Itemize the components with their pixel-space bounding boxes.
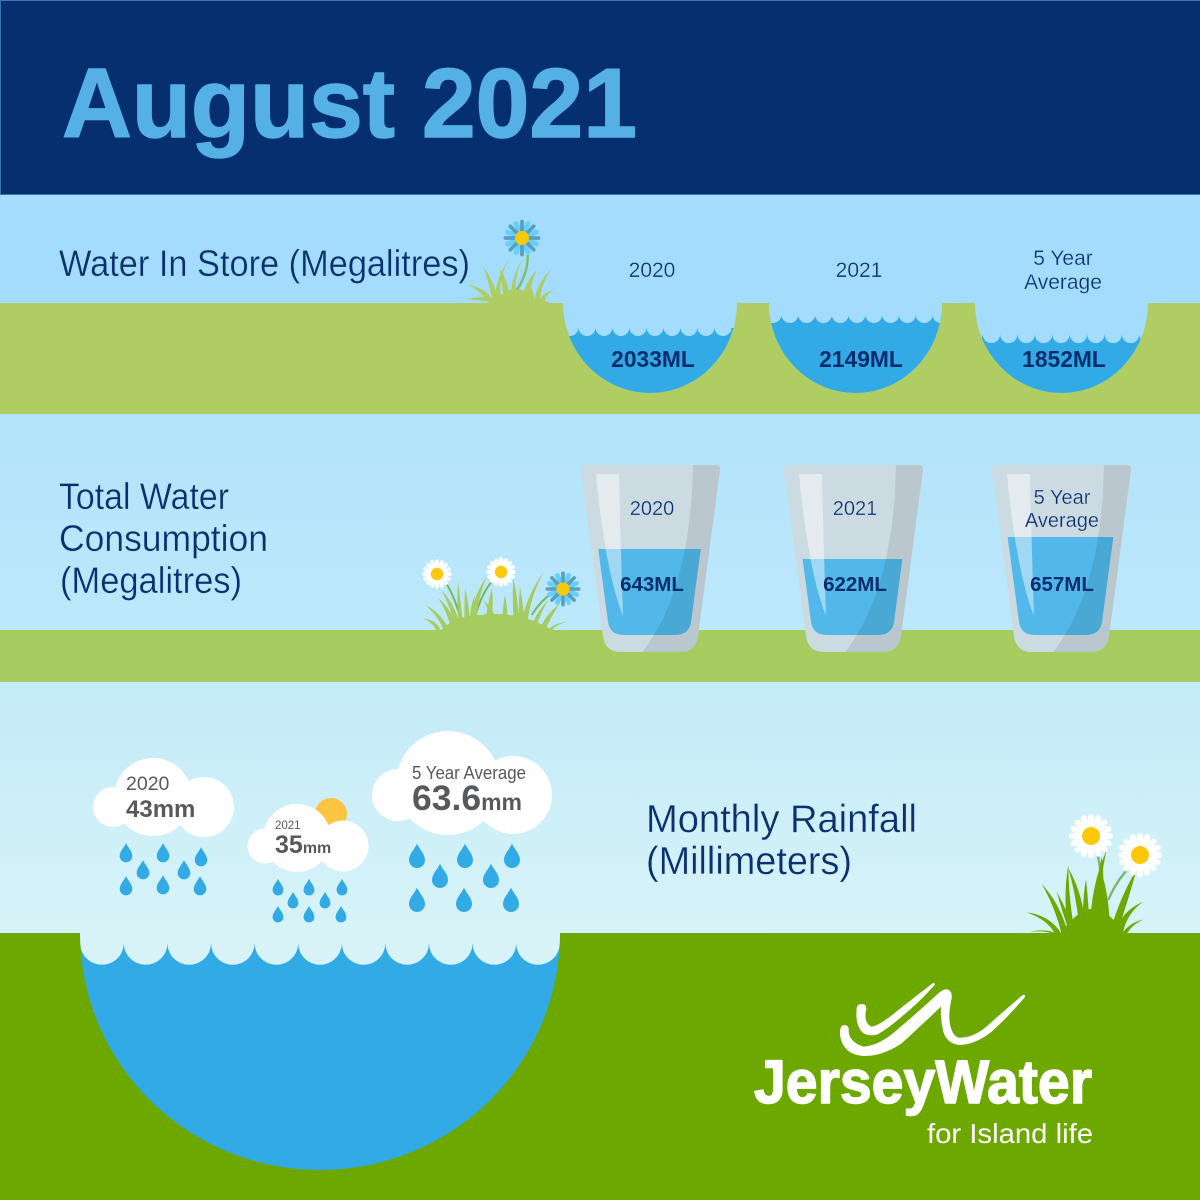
icon: daisies and blue flower with grass bbox=[423, 559, 579, 631]
glass: 5 year average: Average bbox=[1025, 510, 1099, 532]
heading: total water consumption: Total Water bbox=[59, 476, 229, 517]
water bowl: 2021 bbox=[765, 259, 945, 398]
heading: water in store: Water In Store (Megalitres) bbox=[59, 243, 470, 284]
raindrops: 2020 bbox=[120, 843, 207, 895]
logo mark: waves bbox=[840, 983, 1025, 1056]
panel: water in store bbox=[0, 195, 1200, 414]
water bowl: 2020 bbox=[560, 259, 740, 398]
cloud: 2021 with sun bbox=[248, 798, 368, 872]
heading: monthly rainfall bbox=[646, 798, 917, 883]
panel: total water consumption bbox=[0, 414, 1200, 682]
water bowl: 2021: 2021 bbox=[836, 259, 882, 282]
glass: 2020: 2020 bbox=[630, 498, 674, 520]
heading: total water consumption bbox=[59, 476, 268, 601]
title: August 2021 bbox=[62, 48, 637, 158]
cloud: 2021 with sun: 35mm bbox=[275, 831, 331, 859]
heading: monthly rainfall: (Millimeters) bbox=[646, 840, 852, 883]
glass: 5 year average: 657ML bbox=[1030, 573, 1094, 596]
cloud: 2020: 43mm bbox=[126, 796, 195, 823]
glass: 2020: 643ML bbox=[620, 573, 684, 596]
water bowl: 5 year average: Average bbox=[1024, 271, 1102, 294]
cloud: 5 year average: 63.6mm bbox=[412, 778, 522, 818]
logo tagline: for Island life bbox=[927, 1118, 1093, 1149]
water bowl: large reservoir bbox=[78, 932, 562, 1170]
cloud: 2020: 2020 bbox=[126, 773, 170, 795]
icon: blue flower with grass bbox=[467, 222, 555, 304]
raindrops: 5 year average bbox=[409, 844, 520, 912]
glass: 5 year average: 5 Year bbox=[1034, 487, 1091, 509]
heading: total water consumption: Consumption bbox=[59, 518, 268, 559]
water bowl: 2020: 2020 bbox=[629, 259, 675, 282]
logo wordmark: JerseyWater bbox=[754, 1048, 1092, 1116]
logo: Jersey Water bbox=[754, 983, 1093, 1149]
cloud: 2020 bbox=[93, 758, 234, 837]
heading: total water consumption: (Megalitres) bbox=[60, 560, 242, 601]
water bowl: 5 year average: 5 Year bbox=[1033, 247, 1093, 270]
water bowl: 5 year average: 1852ML bbox=[1022, 346, 1106, 372]
panel: monthly rainfall bbox=[0, 682, 1200, 1200]
glass: 2021: 622ML bbox=[823, 573, 887, 596]
cloud: 5 year average: 5 Year Average bbox=[412, 763, 526, 783]
raindrops: 2021 bbox=[273, 879, 347, 922]
header band bbox=[0, 0, 1200, 195]
water bowl: 5 year average bbox=[970, 247, 1150, 398]
heading: monthly rainfall: Monthly Rainfall bbox=[646, 798, 917, 841]
water bowl: 2021: 2149ML bbox=[819, 346, 903, 372]
glass: 2020 bbox=[581, 465, 720, 652]
cloud: 5 year average bbox=[372, 731, 552, 835]
glass: 2021: 2021 bbox=[833, 498, 877, 520]
glass: 2021 bbox=[784, 465, 924, 652]
water bowl: 2020: 2033ML bbox=[611, 346, 695, 372]
glass: 5 year average bbox=[992, 465, 1132, 652]
icon: daisies with grass bbox=[1027, 817, 1159, 934]
cloud: 2021 with sun: 2021 bbox=[275, 820, 301, 832]
